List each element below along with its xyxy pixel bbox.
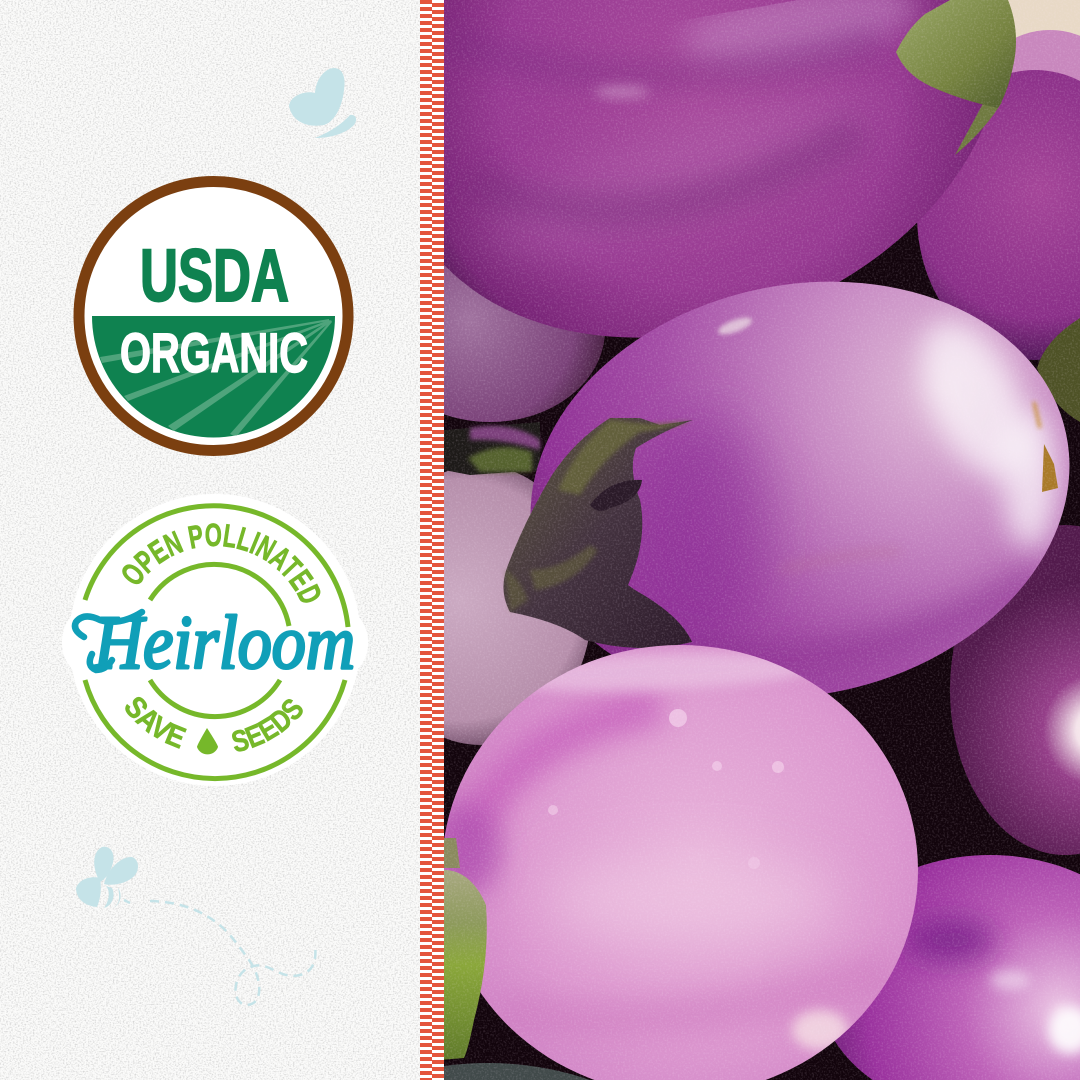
eggplant: upper right pale	[1012, 30, 1080, 81]
eggplant: bottom large	[430, 645, 918, 1080]
seal word: USDA: USDA	[140, 234, 289, 317]
icon: butterfly	[289, 68, 356, 138]
badge text: open pollinated: OPEN POLLINATED	[122, 523, 320, 603]
badge text: seeds: SEEDS	[232, 699, 303, 752]
border: striped edge	[420, 0, 444, 1080]
stem: dark sliver at bottom	[444, 1063, 590, 1080]
panel: eggplant photograph	[444, 0, 1080, 1080]
eggplant: right upper	[917, 70, 1080, 360]
badge text: save: SAVE	[125, 696, 187, 749]
stem: small dark stem left	[444, 422, 540, 475]
eggplant: left shaded	[444, 265, 605, 422]
seal field: green half circle	[92, 316, 335, 438]
eggplant: bottom right	[818, 855, 1080, 1080]
stem: top eggplant calyx	[896, 0, 1016, 155]
stem: right small green	[1037, 318, 1080, 422]
stem: bottom eggplant calyx	[440, 838, 487, 1060]
badge backing	[62, 494, 368, 786]
eggplant: left pale	[444, 470, 588, 745]
texture: skin grain	[444, 0, 1080, 1080]
wordmark flourish	[75, 612, 142, 670]
badge: USDA Organic	[79, 182, 348, 450]
icon: bee	[76, 847, 138, 908]
badge: Heirloom open pollinated	[62, 494, 368, 786]
seal word: ORGANIC: ORGANIC	[120, 321, 308, 384]
eggplant: right middle	[950, 525, 1080, 855]
eggplant: top large	[444, 0, 984, 338]
badge wordmark: Heirloom: Heirloom	[93, 601, 355, 685]
stem: centre eggplant calyx	[503, 418, 693, 648]
panel: fabric background	[0, 0, 420, 1080]
eggplant: centre large	[530, 282, 1070, 694]
flight path: dashed trail	[124, 900, 315, 1005]
icon: seed drop	[197, 728, 218, 754]
badge rings	[85, 506, 348, 779]
seal rays	[100, 319, 332, 437]
